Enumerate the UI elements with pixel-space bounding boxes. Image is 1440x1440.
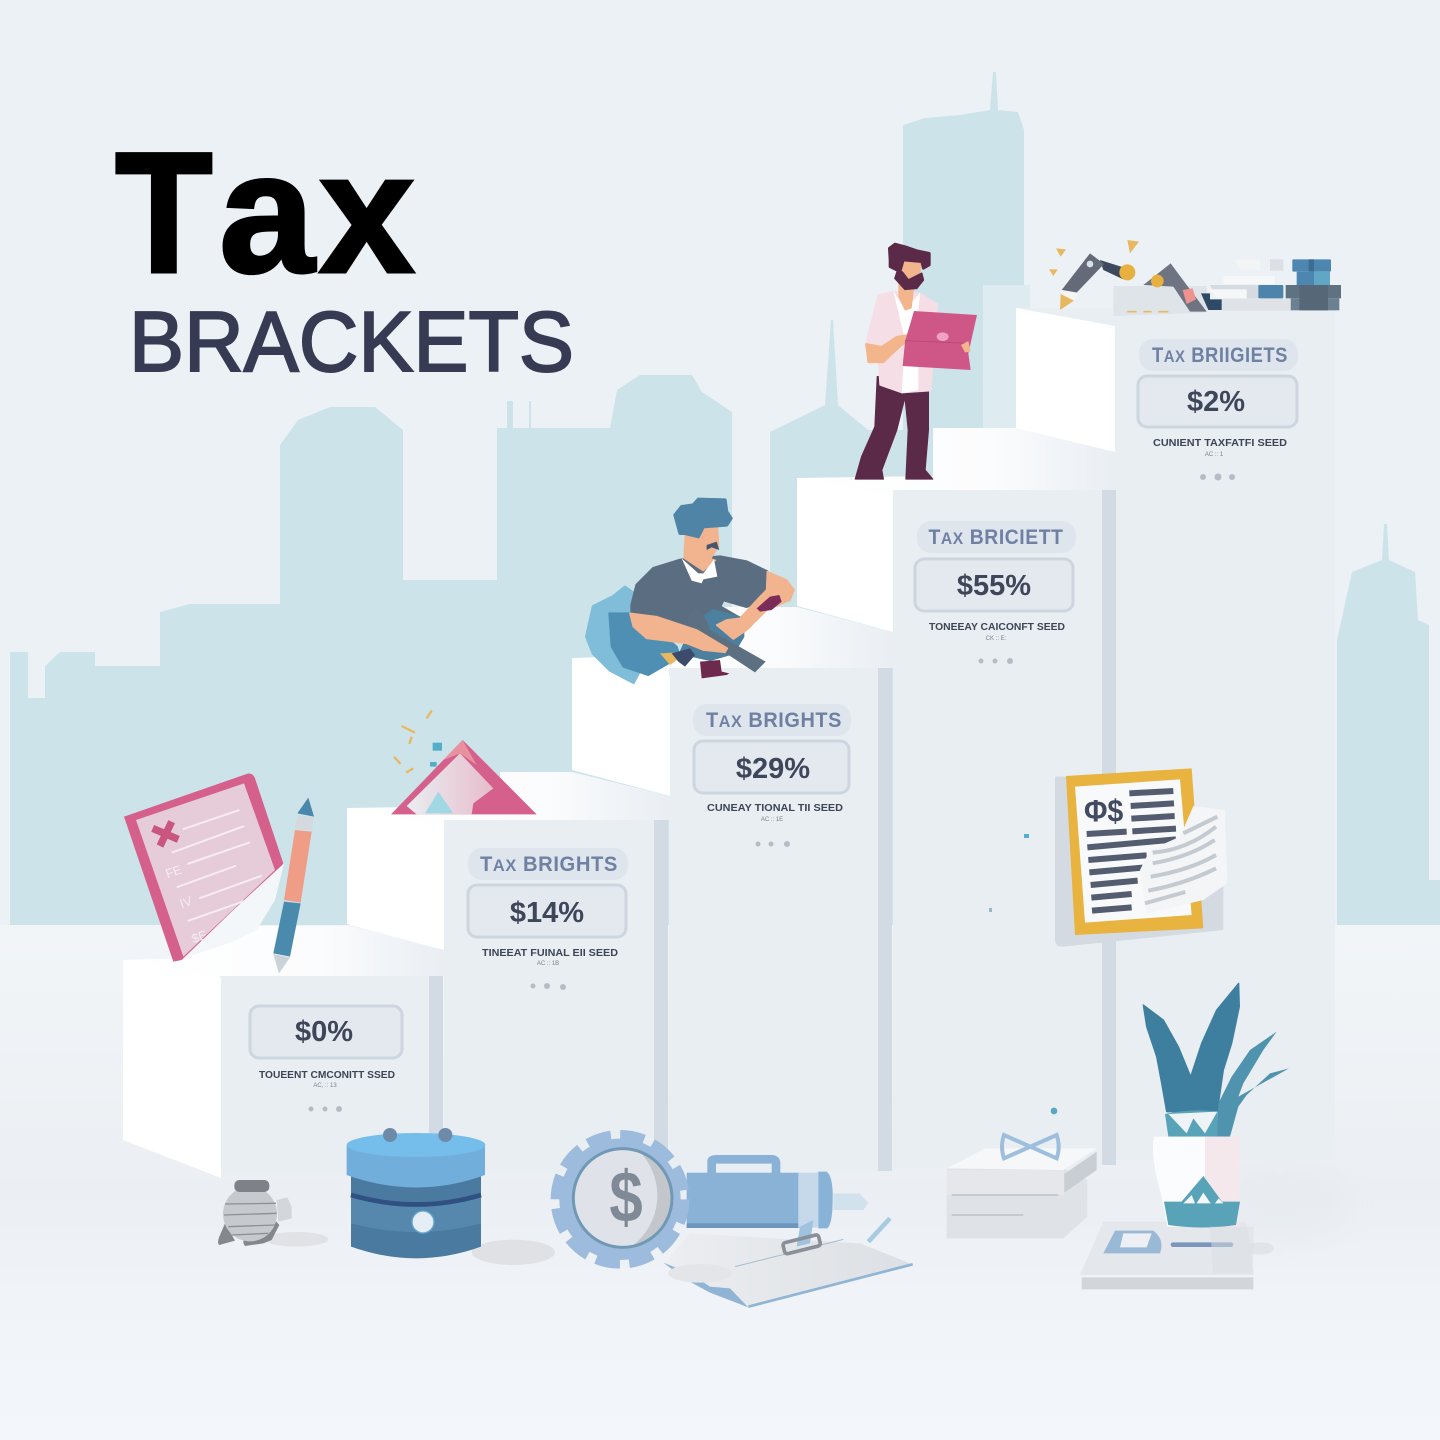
step 5 column <box>797 308 1335 1165</box>
panel: bracket step 1: AC, :: 13 <box>313 1083 337 1089</box>
panel: bracket step 5: AC :: 1 <box>1205 452 1224 458</box>
icon: gear with dollar sign and blue canister <box>557 1136 868 1263</box>
gear: $ <box>609 1157 643 1238</box>
page curl <box>183 863 284 958</box>
icon: pink checklist document and pencil: $E <box>190 928 209 946</box>
icon: yellow framed tax document <box>1055 768 1227 947</box>
title word: Brackets: BRACKETS <box>129 295 574 390</box>
man legs <box>855 377 933 479</box>
panel: bracket step 5: CUNIENT TAXFATFI SEED <box>1153 437 1287 449</box>
panel: bracket step 2: TAX BRIGHTS <box>480 853 618 876</box>
ground shadow <box>1210 1165 1350 1245</box>
icon: grey striped ball <box>218 1180 328 1247</box>
pot <box>1153 1137 1205 1227</box>
panel: bracket step 2 <box>468 848 628 990</box>
title letter: T: T <box>115 118 213 309</box>
icon: gift box with ribbon <box>947 1108 1097 1238</box>
leaves <box>1143 1005 1191 1112</box>
curled overlay page <box>1140 806 1227 913</box>
panel: bracket step 2: TINEEAT FUINAL EII SEED <box>482 947 618 959</box>
panel: bracket step 5 <box>1138 339 1298 480</box>
man undershirt <box>893 291 920 393</box>
panel: bracket step 5: TAX BRIIGIETS <box>1152 344 1288 367</box>
icon: standing man with laptop <box>855 244 977 479</box>
book <box>1080 1222 1254 1275</box>
crouching man shirt <box>632 557 767 637</box>
panel: bracket step 1: TOUEENT CMCONITT SSED <box>259 1069 395 1081</box>
crouching man trousers <box>680 610 743 660</box>
pot shadow <box>1210 1227 1254 1273</box>
icon: crouching man with tool <box>587 499 794 682</box>
panel: bracket step 5: $2% <box>1187 386 1245 418</box>
ribbon bow <box>1002 1135 1059 1158</box>
ground <box>0 925 1440 1440</box>
panel: bracket step 2: AC :: 1B <box>537 961 559 967</box>
document frame <box>124 773 283 962</box>
icon: potted plant on book <box>1080 983 1289 1289</box>
gear <box>557 1136 683 1263</box>
canister <box>687 1173 800 1228</box>
panel: bracket step 2: $14% <box>510 897 584 929</box>
panel: bracket step 4: TAX BRICIETT <box>928 526 1064 549</box>
step 2 column <box>123 808 654 1172</box>
icon: pink checklist document and pencil <box>124 773 314 973</box>
panel: bracket step 1: $0% <box>295 1016 353 1048</box>
panel: bracket step 4: CK :: E: <box>986 636 1007 642</box>
pencil <box>273 798 314 973</box>
step 4 column <box>572 478 1102 1171</box>
panel: bracket step 4: $55% <box>957 570 1031 602</box>
document currency glyphs: Φ$ <box>1084 794 1123 829</box>
man shirt <box>865 292 937 393</box>
title <box>115 117 574 390</box>
icon: paper sheet under gear <box>663 1218 913 1307</box>
panel: bracket step 3: TAX BRIGHTS <box>706 709 842 732</box>
panel: bracket step 3: $29% <box>736 753 810 785</box>
small ground dots <box>989 834 1029 912</box>
nozzle <box>833 1193 868 1210</box>
title letters: ax: ax <box>219 117 415 309</box>
icon: pink mountain with confetti <box>391 711 537 814</box>
red cross mark <box>153 822 178 846</box>
panel: bracket step 1 <box>250 1006 402 1112</box>
step 3 column <box>347 658 878 1172</box>
icon: blue cylinder container <box>347 1128 555 1265</box>
panel: bracket step 4 <box>915 521 1076 664</box>
man laptop <box>903 311 977 370</box>
panel: bracket step 3: CUNEAY TIONAL TII SEED <box>707 802 843 814</box>
clasp <box>783 1234 821 1254</box>
panel: bracket step 4: TONEEAY CAICONFT SEED <box>929 621 1065 633</box>
step 1 column <box>123 960 429 1178</box>
panel: bracket step 3: AC :: 1E <box>761 817 783 823</box>
icon: pink checklist document and pencil: IV <box>178 894 194 911</box>
staircase <box>123 308 1335 1178</box>
icon: pink checklist document and pencil: FE <box>164 863 184 881</box>
panel: bracket step 3 <box>693 704 851 847</box>
crouching man hair <box>675 499 731 537</box>
skyline silhouette <box>10 72 1440 925</box>
man hair <box>889 244 929 272</box>
icon: tools and books on top step <box>1049 240 1341 316</box>
